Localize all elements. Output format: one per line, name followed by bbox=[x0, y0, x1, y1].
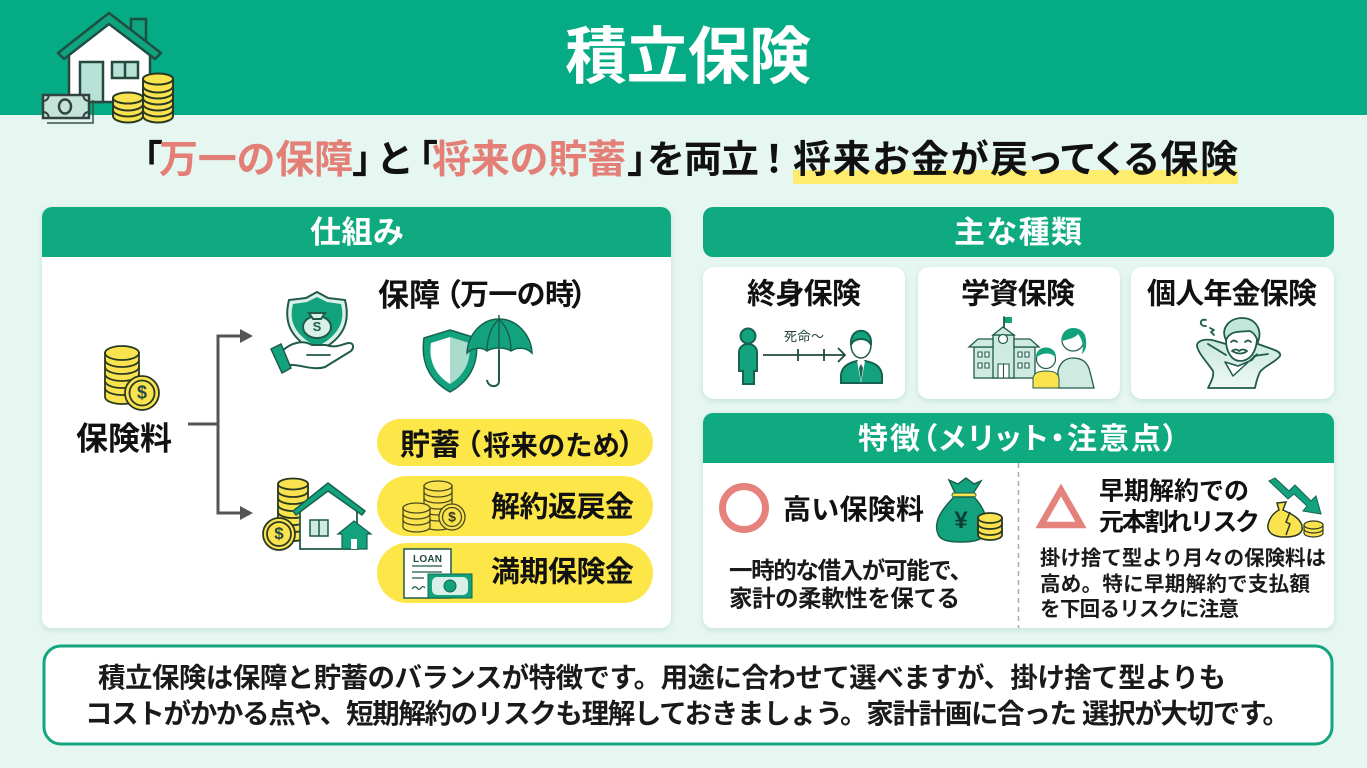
icon: circle mark bbox=[722, 486, 766, 530]
icon: shield and umbrella bbox=[423, 315, 532, 392]
summary text: 積立保険は保障と貯蓄のバランスが特徴です。用途に合わせて選べますが、掛け捨て型よりも bbox=[98, 662, 1226, 693]
title: 積立保険 bbox=[565, 23, 811, 92]
subtitle: を bbox=[647, 140, 685, 182]
text: 保障（万一の時）: ） bbox=[570, 278, 601, 313]
subtitle: 両立 bbox=[684, 140, 759, 182]
summary box bbox=[44, 646, 1332, 744]
icon: falling arrow and broken bag bbox=[1268, 478, 1323, 537]
arrow: split to coverage and savings bbox=[188, 329, 253, 520]
subtitle: ！ bbox=[755, 140, 793, 182]
pill: 満期保険金 bbox=[377, 543, 653, 603]
subtitle: 「 bbox=[400, 140, 438, 182]
icon: school and family bbox=[969, 317, 1094, 388]
merit block bbox=[722, 478, 1002, 612]
pill: 満期保険金: 満期保険金 bbox=[491, 556, 634, 588]
icon: premium coins bbox=[105, 346, 159, 410]
pill: 満期保険金: LOAN bbox=[413, 554, 442, 565]
caution title: 早期解約での bbox=[1099, 478, 1249, 506]
pill: 解約返戻金: 解約返戻金 bbox=[491, 490, 634, 524]
icon: house with money and coins bbox=[43, 13, 173, 123]
subtitle: と bbox=[376, 140, 414, 182]
icon: coins with house: $ bbox=[274, 524, 284, 543]
icon: person to adult timeline: 死命〜 bbox=[784, 329, 824, 344]
icon: hand holding shield bbox=[271, 292, 353, 373]
text: 保障（万一の時）: （ bbox=[431, 278, 462, 313]
caution block: 高め。特に早期解約で支払額 bbox=[1040, 573, 1310, 596]
icon: premium coins: $ bbox=[137, 382, 147, 402]
pill: 貯蓄（将来のため）: （ bbox=[453, 430, 482, 462]
card: 終身保険: 終身保険 bbox=[747, 278, 861, 310]
pill: 貯蓄（将来のため）: 将来のため bbox=[483, 430, 620, 461]
merit title: 高い保険料 bbox=[783, 494, 924, 525]
panel heading: 特徴（メリット・注意点）: 特徴（メリット・注意点） bbox=[858, 423, 1178, 456]
subtitle bbox=[125, 139, 1238, 184]
subtitle: 将来お金が戻ってくる保険 bbox=[793, 140, 1238, 182]
subtitle: 」 bbox=[352, 140, 390, 182]
pill: 貯蓄（将来のため）: ） bbox=[618, 430, 647, 462]
icon: person to adult timeline bbox=[739, 328, 882, 384]
caution block: 元本割れリスク bbox=[1099, 508, 1260, 536]
text: 保障（万一の時） bbox=[378, 278, 601, 313]
panel: 仕組み bbox=[42, 207, 671, 628]
icon: relaxed senior bbox=[1197, 318, 1280, 388]
caution text: 掛け捨て型より月々の保険料は bbox=[1040, 547, 1326, 570]
pill: 解約返戻金 bbox=[377, 476, 653, 536]
label: 保険料: 保険料 bbox=[76, 420, 172, 456]
highlight bbox=[793, 170, 1238, 184]
header band bbox=[0, 0, 1367, 115]
icon: triangle mark bbox=[1041, 490, 1081, 525]
caution block bbox=[1040, 478, 1326, 621]
pill: 貯蓄（将来のため） bbox=[377, 419, 653, 466]
panel heading: 仕組み bbox=[42, 207, 671, 257]
icon: yen money bag bbox=[937, 478, 1002, 542]
merit block: 家計の柔軟性を保てる bbox=[729, 586, 960, 612]
pill: 貯蓄（将来のため）: 貯蓄 bbox=[400, 429, 460, 462]
panel heading: 特徴（メリット・注意点） bbox=[703, 413, 1334, 463]
icon: hand holding shield: S bbox=[313, 319, 322, 334]
text: 保障（万一の時）: 保障 bbox=[378, 278, 440, 313]
card: 個人年金保険 bbox=[1131, 267, 1334, 399]
summary text bbox=[85, 662, 1290, 729]
panel heading: 主な種類: 主な種類 bbox=[954, 215, 1082, 250]
icon: yen money bag: ¥ bbox=[954, 507, 968, 534]
subtitle: 万一の保障 bbox=[159, 139, 353, 182]
caution block: を下回るリスクに注意 bbox=[1040, 598, 1239, 621]
panel heading: 仕組み: 仕組み bbox=[310, 215, 404, 250]
card: 終身保険 bbox=[703, 267, 905, 399]
icon: coins with house bbox=[263, 478, 371, 550]
card: 学資保険 bbox=[918, 267, 1120, 399]
panel heading: 主な種類 bbox=[703, 207, 1334, 257]
text: 保障（万一の時）: 万一の時 bbox=[460, 278, 574, 312]
panel: 特徴 bbox=[703, 413, 1334, 628]
pill: 解約返戻金: $ bbox=[448, 508, 456, 524]
subtitle: 」 bbox=[627, 140, 665, 182]
merit text: 一時的な借入が可能で、 bbox=[729, 556, 973, 584]
subtitle: 「 bbox=[125, 140, 163, 182]
summary text: コストがかかる点や、短期解約のリスクも理解しておきましょう。家計計画に合った 選択が大切です。 bbox=[85, 698, 1290, 729]
subtitle: 将来の貯蓄 bbox=[432, 139, 626, 182]
card: 個人年金保険: 個人年金保険 bbox=[1147, 278, 1317, 310]
card: 学資保険: 学資保険 bbox=[961, 278, 1075, 310]
